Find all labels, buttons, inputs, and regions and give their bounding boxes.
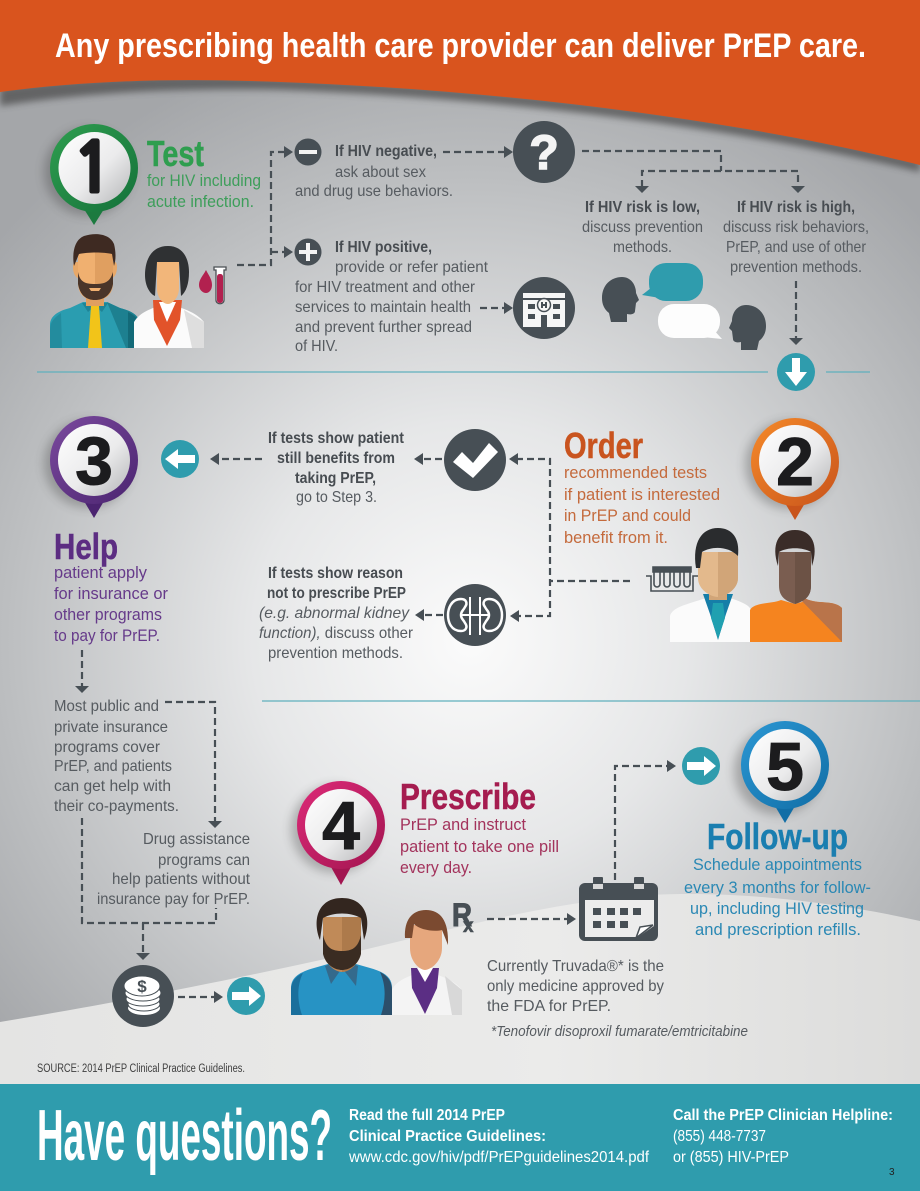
- patient and doctor, step 4: [291, 898, 462, 1015]
- step 5 heading: Schedule appointments: [693, 856, 862, 874]
- text: tests show benefit: [268, 430, 405, 506]
- arrow from coins: [178, 991, 223, 1003]
- text: HIV positive: provide or refer patient: [335, 259, 489, 276]
- text: HIV negative: [295, 143, 453, 200]
- icon: question mark: [513, 121, 575, 183]
- step 2 heading: recommended tests: [564, 464, 707, 482]
- guidelines block: Clinical Practice Guidelines:: [349, 1128, 546, 1145]
- arrow down to step 2: [789, 281, 803, 345]
- arrow down to insurance text: [75, 650, 89, 693]
- text: HIV negative: ask about sex: [335, 164, 426, 181]
- step 4 heading: every day.: [400, 859, 472, 877]
- step 1 heading: acute infection.: [147, 193, 254, 211]
- text: Truvada note: Currently Truvada®* is the: [487, 958, 664, 975]
- step 1 heading: [147, 133, 261, 211]
- woman: [134, 246, 204, 348]
- text: low risk: discuss prevention: [582, 219, 703, 236]
- text: low risk: [582, 199, 703, 256]
- step 5 heading: and prescription refills.: [695, 921, 861, 939]
- text: drug assistance: insurance pay for PrEP.: [97, 891, 250, 908]
- footer headline: Have questions?: [37, 1096, 332, 1176]
- text: high risk: [723, 199, 869, 276]
- step 4 heading: Prescribe: [400, 776, 536, 817]
- icon: Rx symbol: x: [463, 916, 474, 937]
- doctor: [670, 528, 752, 642]
- risk split arrows: [582, 151, 805, 193]
- text: high risk: If HIV risk is high,: [737, 199, 855, 216]
- icon: teal right arrow, coins: [227, 977, 265, 1015]
- step 4 pin: [291, 781, 385, 885]
- icon: minus: [294, 138, 322, 166]
- helpline block: or (855) HIV-PrEP: [673, 1149, 789, 1166]
- source line: SOURCE: 2014 PrEP Clinical Practice Guidelines.: [37, 1063, 245, 1075]
- patient: [750, 530, 842, 642]
- text: tests show benefit: If tests show patient: [268, 430, 405, 447]
- text: public and private insurance: [54, 698, 179, 815]
- text: high risk: discuss risk behaviors,: [723, 219, 869, 236]
- icon: coins: $: [137, 977, 147, 996]
- text: low risk: If HIV risk is low,: [585, 199, 700, 216]
- text: HIV positive: [295, 239, 489, 355]
- text: tests show reason not to: If tests show reason: [268, 565, 403, 582]
- text: tests show reason not to: not to prescribe PrEP: [267, 585, 406, 602]
- step 2 heading: Order: [564, 425, 643, 466]
- step 5 heading: Follow-up: [707, 816, 848, 857]
- step 3 heading: [54, 526, 168, 645]
- arrows from step 1: [237, 146, 293, 265]
- arrow from calendar to step 5: [615, 760, 676, 880]
- icon: teal right arrow, step 5: [682, 747, 720, 785]
- icon: Rx symbol: R: [452, 897, 472, 933]
- text: tests show benefit: still benefits from: [277, 450, 395, 467]
- text: tests show benefit: go to Step 3.: [296, 489, 377, 506]
- text: public and private insurance: programs cover: [54, 739, 161, 756]
- step 2 pin: [745, 418, 839, 520]
- step 3 heading: Help: [54, 526, 118, 567]
- step 2 heading: [564, 425, 720, 547]
- footnote: *Tenofovir disoproxil fumarate/emtricitabine: [491, 1024, 748, 1040]
- icon: question mark: ?: [529, 127, 559, 180]
- text: HIV positive: for HIV treatment and other: [295, 279, 476, 296]
- step 3 pin: 3: [75, 423, 113, 499]
- icon: calendar: [579, 877, 658, 941]
- text: drug assistance: programs can: [158, 852, 250, 869]
- helpline block: [673, 1107, 893, 1166]
- step 4 heading: patient to take one pill: [400, 838, 559, 856]
- text: drug assistance: help patients without: [112, 871, 251, 888]
- doctor and patient, step 2: [670, 528, 842, 642]
- text: public and private insurance: private insurance: [54, 719, 168, 736]
- arrow to step 3 text: [414, 453, 442, 465]
- text: public and private insurance: PrEP, and patients: [54, 758, 172, 775]
- woman: [392, 910, 462, 1015]
- arrow to teal left arrow: [210, 453, 262, 465]
- guidelines block: www.cdc.gov/hiv/pdf/PrEPguidelines2014.pdf: [348, 1149, 650, 1166]
- step 5 heading: every 3 months for follow-: [684, 879, 871, 897]
- man: [50, 234, 140, 348]
- icon: plus: [294, 238, 322, 266]
- icon: coins: [112, 965, 174, 1027]
- step 1 heading: for HIV including: [147, 172, 261, 190]
- patient and doctor, step 1: [50, 234, 204, 348]
- text: high risk: prevention methods.: [730, 259, 862, 276]
- icon: kidneys: [444, 584, 506, 646]
- header banner: [0, 0, 920, 172]
- helpline block: Call the PrEP Clinician Helpline:: [673, 1107, 893, 1124]
- step 4 pin: 4: [322, 788, 360, 864]
- arrow to question icon: [443, 146, 513, 158]
- text: high risk: PrEP, and use of other: [726, 239, 867, 256]
- arrow to hospital: [480, 302, 513, 314]
- icon: hospital: [513, 277, 575, 339]
- step 3 heading: patient apply: [54, 564, 148, 582]
- step 1 heading: Test: [147, 133, 204, 174]
- text: HIV negative: and drug use behaviors.: [295, 183, 453, 200]
- text: tests show reason not to: [259, 565, 414, 662]
- step 1 pin: [44, 124, 138, 225]
- text: Truvada note: only medicine approved by: [487, 978, 664, 995]
- step 4 heading: [400, 776, 559, 877]
- step 5 heading: up, including HIV testing: [690, 900, 864, 918]
- step 2 heading: in PrEP and could: [564, 507, 691, 525]
- text: drug assistance: Drug assistance: [143, 831, 250, 848]
- icon: test tube rack: [646, 567, 698, 591]
- step 2 heading: if patient is interested: [564, 486, 720, 504]
- arrow from kidneys: [415, 609, 443, 621]
- section dividers: [37, 372, 920, 701]
- bracket arrow to coins: [82, 818, 216, 960]
- helpline block: (855) 448-7737: [673, 1128, 766, 1145]
- step 4 heading: PrEP and instruct: [400, 816, 526, 834]
- arrows from step 2: [509, 453, 630, 622]
- page number: 3: [889, 1167, 895, 1178]
- icon: teal down arrow: [777, 353, 815, 391]
- man: [291, 898, 392, 1015]
- text: public and private insurance: their co-payments.: [54, 798, 179, 815]
- text: HIV positive: of HIV.: [295, 338, 338, 355]
- arrow to drug assistance text: [165, 702, 222, 828]
- step 5 pin: [734, 721, 829, 823]
- icon: teal left arrow: [161, 440, 199, 478]
- text: low risk: methods.: [613, 239, 672, 256]
- text: HIV positive: If HIV positive,: [335, 239, 432, 256]
- text: tests show reason not to: (e.g. abnormal kidney: [259, 605, 410, 622]
- text: Truvada note: the FDA for PrEP.: [487, 998, 611, 1015]
- step 3 pin: [44, 416, 138, 518]
- step 1 pin: 1: [72, 136, 114, 203]
- icon: blood drop and tube: [199, 267, 226, 304]
- text: public and private insurance: can get help with: [54, 778, 171, 795]
- icon: two heads talking: [602, 263, 766, 350]
- step 3 heading: for insurance or: [54, 585, 168, 603]
- text: drug assistance: [97, 831, 251, 908]
- text: tests show reason not to: prevention methods.: [268, 645, 403, 662]
- step 5 pin: 5: [766, 729, 804, 805]
- text: tests show benefit: taking PrEP,: [295, 470, 376, 487]
- step 2 pin: 2: [776, 424, 814, 500]
- text: HIV negative: If HIV negative,: [335, 143, 437, 160]
- guidelines block: Read the full 2014 PrEP: [349, 1107, 505, 1124]
- text: tests show reason not to: function), discuss other: [259, 625, 414, 642]
- text: Truvada note: [487, 958, 664, 1015]
- icon: check mark: [444, 429, 506, 491]
- step 3 heading: other programs: [54, 606, 162, 624]
- step 3 heading: to pay for PrEP.: [54, 627, 160, 645]
- lower light wave: [0, 894, 920, 1090]
- step 2 heading: benefit from it.: [564, 529, 668, 547]
- guidelines block: [348, 1107, 650, 1166]
- text: HIV positive: services to maintain health: [295, 299, 471, 316]
- arrow to calendar: [487, 913, 576, 925]
- text: public and private insurance: Most public and: [54, 698, 159, 715]
- text: HIV positive: and prevent further spread: [295, 319, 472, 336]
- footer band: [0, 1084, 920, 1191]
- step 5 heading: [684, 816, 871, 939]
